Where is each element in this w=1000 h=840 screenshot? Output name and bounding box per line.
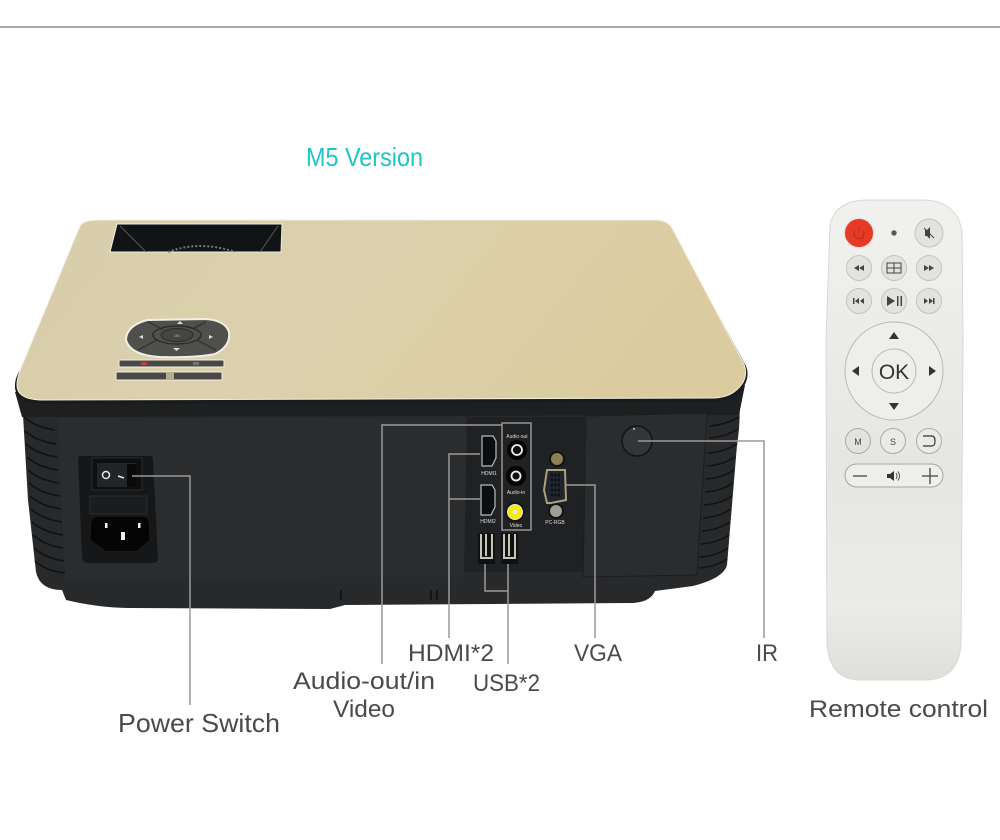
label: HDMI*2: HDMI*2 — [408, 640, 494, 667]
power button — [844, 218, 874, 248]
hdmi ports — [480, 436, 497, 525]
gold top — [15, 220, 748, 404]
labels — [118, 640, 988, 738]
back panel recesses — [58, 417, 467, 578]
label: Video: Video — [333, 696, 395, 723]
vga port: PC-RGB — [545, 520, 565, 526]
usb ports — [478, 533, 518, 564]
media buttons — [846, 219, 943, 314]
label: VGA: VGA — [574, 640, 622, 667]
power inlet module — [78, 456, 158, 563]
projector — [15, 220, 748, 609]
label: Power Switch: Power Switch — [118, 708, 280, 738]
mode buttons: S — [890, 437, 896, 447]
remote body — [826, 200, 963, 680]
projector body — [22, 398, 740, 609]
side vents — [24, 417, 739, 573]
label: Audio-out/in: Audio-out/in — [293, 668, 435, 695]
audio and video jacks: Audio-out — [506, 434, 528, 440]
remote control — [826, 200, 963, 680]
hdmi ports: HDMI1 — [481, 471, 497, 477]
lens opening — [110, 224, 282, 252]
audio and video jacks — [502, 423, 531, 530]
label: IR: IR — [756, 640, 778, 667]
label: USB*2: USB*2 — [473, 670, 540, 697]
mode buttons: M — [854, 437, 862, 447]
d-pad: OK — [879, 361, 909, 384]
vga port — [544, 452, 566, 526]
d-pad — [845, 322, 943, 420]
audio and video jacks: Video — [510, 523, 523, 529]
audio and video jacks: Audio-in — [507, 490, 525, 496]
control keypad: OK — [174, 333, 180, 338]
title: M5 Version: M5 Version — [306, 142, 423, 172]
hdmi ports: HDMI2 — [480, 519, 496, 525]
ir sensor — [622, 426, 652, 456]
label: Remote control: Remote control — [809, 696, 988, 723]
callout leader lines — [132, 425, 764, 705]
volume rocker — [845, 464, 943, 487]
control keypad — [116, 319, 229, 380]
mode buttons — [846, 428, 942, 454]
